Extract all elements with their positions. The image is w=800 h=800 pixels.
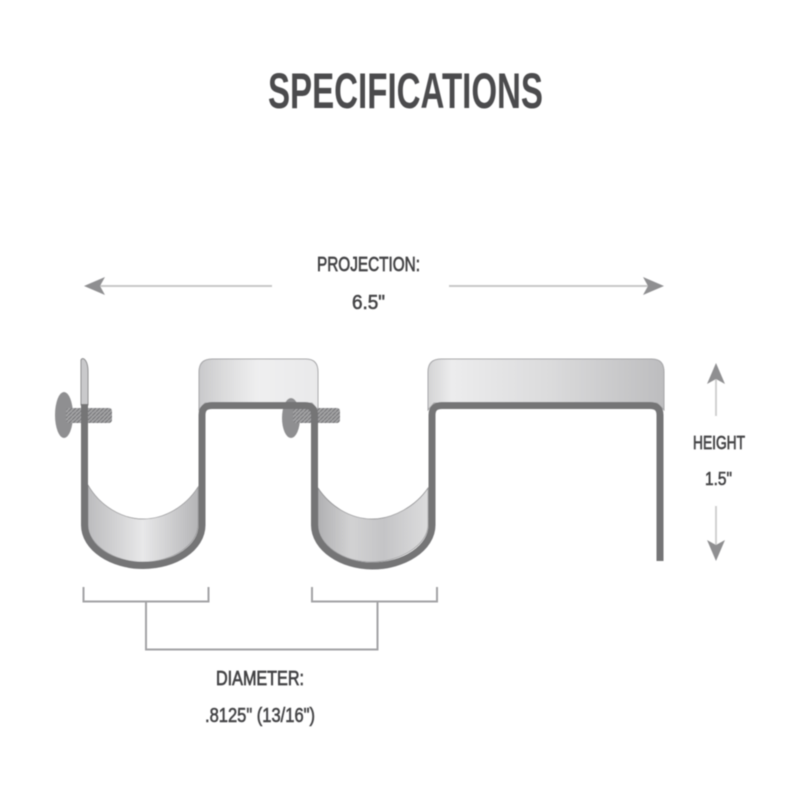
diameter value: .8125" (13/16") <box>205 705 315 727</box>
bracket face: right top <box>428 359 664 410</box>
bracket face: left cup <box>88 485 198 562</box>
bracket face: right cup <box>318 488 428 562</box>
height up arrow <box>707 363 725 416</box>
left screw <box>55 392 112 438</box>
middle screw <box>282 398 340 438</box>
diameter dimension <box>84 587 437 727</box>
bracket face: middle top <box>199 359 318 410</box>
diameter brackets <box>84 587 437 650</box>
bracket drawing <box>55 359 664 566</box>
projection left arrow <box>84 277 272 295</box>
projection right arrow <box>449 277 664 295</box>
height value: 1.5" <box>705 469 732 489</box>
bracket profile <box>84 404 660 566</box>
height down arrow <box>707 506 725 561</box>
height label: HEIGHT <box>693 433 745 453</box>
title: SPECIFICATIONS <box>268 63 543 119</box>
projection label: PROJECTION: <box>317 254 420 276</box>
projection dimension <box>84 254 664 314</box>
left tab <box>81 359 88 405</box>
height dimension <box>693 363 745 561</box>
diameter label: DIAMETER: <box>216 668 304 690</box>
projection value: 6.5" <box>352 292 385 314</box>
